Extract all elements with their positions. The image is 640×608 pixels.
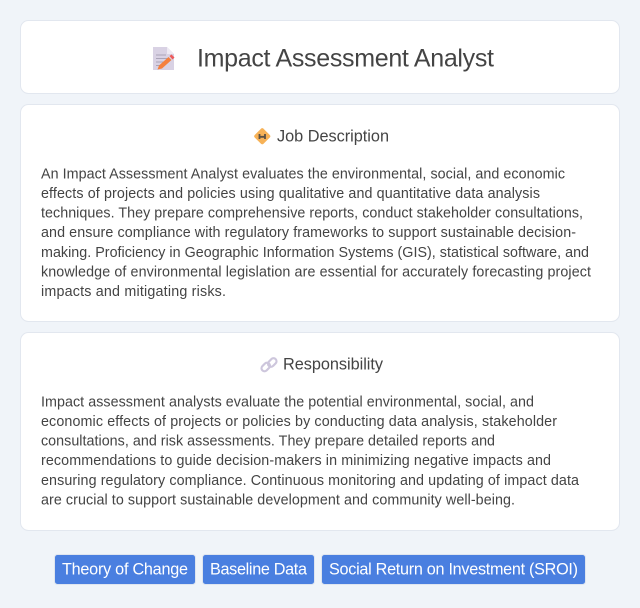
text block: responsibility: recommendations to guide decision-makers in minimizing negative impacts and bbox=[41, 453, 551, 469]
icon: document with pencil bbox=[153, 47, 174, 70]
tag: theory of change bbox=[54, 554, 196, 584]
text block: responsibility: Impact assessment analysts evaluate the potential environmental, social, and bbox=[41, 394, 534, 410]
text block: job description: impacts and mitigating risks. bbox=[41, 284, 226, 300]
panel: responsibility bbox=[20, 332, 620, 530]
tag: social return on investment bbox=[322, 554, 586, 584]
text block: job description: making. Proficiency in Geographic Information Systems (GIS), statistical software, and bbox=[41, 245, 589, 261]
text block: responsibility: are crucial to support sustainable development and community well-being. bbox=[41, 492, 515, 508]
text block: job description: and ensure compliance with regulatory frameworks to support sustainable decision- bbox=[41, 225, 576, 241]
tag: baseline data: Baseline Data bbox=[210, 560, 307, 578]
tag: theory of change: Theory of Change bbox=[62, 560, 188, 578]
tag: social return on investment: Social Return on Investment (SROI) bbox=[329, 560, 578, 578]
icon: chain link bbox=[260, 357, 278, 372]
text block: job description: knowledge of environmental legislation are essential for accurately forecasting project bbox=[41, 264, 591, 280]
text block: responsibility: consultations, and risk assessments. They prepare detailed reports and bbox=[41, 434, 495, 450]
tag: baseline data bbox=[202, 554, 314, 584]
panel: title header bbox=[20, 20, 620, 94]
panel: job description bbox=[20, 104, 620, 322]
text block: job description bbox=[41, 166, 591, 300]
heading: responsibility: Responsibility bbox=[283, 356, 384, 374]
text block: job description: effects of projects and policies using qualitative and quantitative data analysis bbox=[41, 186, 540, 202]
text block: job description: An Impact Assessment Analyst evaluates the environmental, social, and economic bbox=[41, 166, 565, 182]
text block: job description: techniques. They prepare comprehensive reports, conduct stakeholder consultations, bbox=[41, 206, 583, 222]
text block: responsibility: economic effects of projects or policies by conducting data analysis, stakeholder bbox=[41, 414, 557, 430]
text block: responsibility: ensuring regulatory compliance. Continuous monitoring and updating of impact data bbox=[41, 473, 579, 489]
icon: diamond road sign bbox=[253, 127, 271, 145]
heading: job description: Job Description bbox=[277, 128, 389, 146]
text block: responsibility bbox=[41, 394, 579, 508]
title: Impact Assessment Analyst bbox=[197, 44, 494, 72]
